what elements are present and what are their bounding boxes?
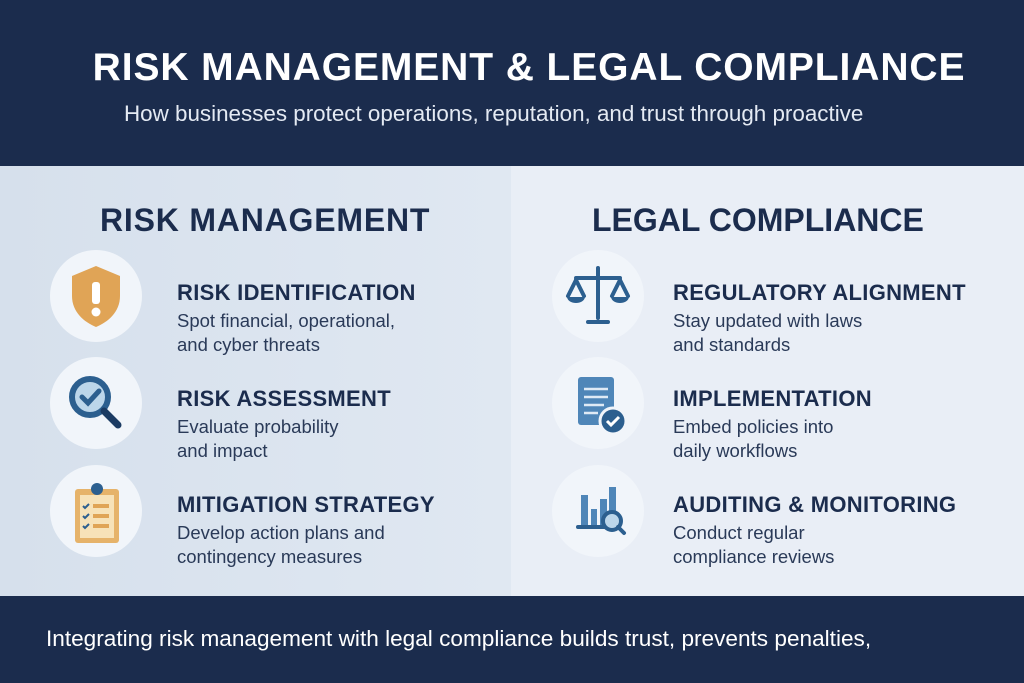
- item: implementation: [673, 386, 872, 461]
- icon: chart magnifier: [552, 465, 644, 557]
- subtitle: How businesses protect operations, reputation, and trust through proactive: [124, 101, 863, 126]
- icon: document check: [552, 357, 644, 449]
- item: mitigation strategy: [177, 492, 435, 567]
- icon: scales: [552, 250, 644, 342]
- item: risk assessment: Evaluate probability: [177, 416, 338, 437]
- item: auditing & monitoring: AUDITING & MONITORING: [673, 492, 956, 517]
- footer text: Integrating risk management with legal compliance builds trust, prevents penalties,: [46, 626, 871, 651]
- item: risk assessment: and impact: [177, 440, 268, 461]
- item: mitigation strategy: Develop action plans and: [177, 522, 385, 543]
- item: auditing & monitoring: compliance reviews: [673, 546, 834, 567]
- item: mitigation strategy: MITIGATION STRATEGY: [177, 492, 435, 517]
- item: implementation: IMPLEMENTATION: [673, 386, 872, 411]
- panel: legal compliance: [511, 166, 1024, 596]
- icon: shield: [50, 250, 142, 342]
- heading: risk management: RISK MANAGEMENT: [100, 202, 430, 238]
- item: risk identification: and cyber threats: [177, 334, 320, 355]
- item: auditing & monitoring: Conduct regular: [673, 522, 805, 543]
- header band: [0, 0, 1024, 166]
- icon: clipboard: [50, 465, 142, 557]
- item: implementation: Embed policies into: [673, 416, 833, 437]
- item: regulatory alignment: REGULATORY ALIGNMENT: [673, 280, 966, 305]
- item: implementation: daily workflows: [673, 440, 797, 461]
- item: mitigation strategy: contingency measures: [177, 546, 362, 567]
- item: regulatory alignment: and standards: [673, 334, 790, 355]
- item: risk assessment: [177, 386, 391, 461]
- item: regulatory alignment: Stay updated with laws: [673, 310, 862, 331]
- panel: risk management: [0, 166, 511, 596]
- item: regulatory alignment: [673, 280, 966, 355]
- heading: legal compliance: LEGAL COMPLIANCE: [592, 202, 924, 238]
- icon: magnifier: [50, 357, 142, 449]
- item: auditing & monitoring: [673, 492, 956, 567]
- footer band: [0, 596, 1024, 683]
- item: risk identification: Spot financial, operational,: [177, 310, 395, 331]
- item: risk identification: [177, 280, 416, 355]
- item: risk assessment: RISK ASSESSMENT: [177, 386, 391, 411]
- item: risk identification: RISK IDENTIFICATION: [177, 280, 416, 305]
- title: RISK MANAGEMENT & LEGAL COMPLIANCE: [93, 46, 965, 89]
